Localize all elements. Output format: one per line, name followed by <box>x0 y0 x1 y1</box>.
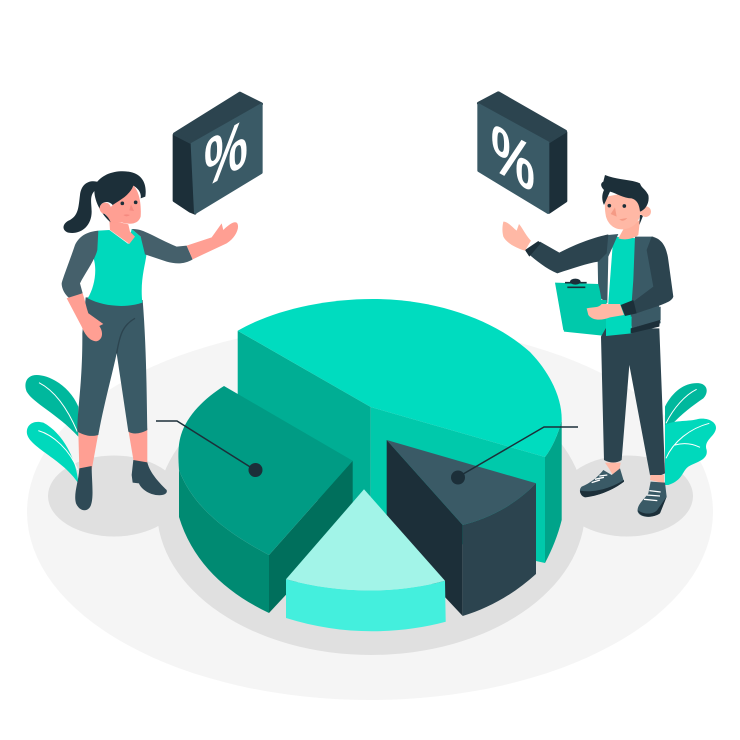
man <box>502 175 673 517</box>
right percent card <box>479 93 566 213</box>
woman: legs and boots <box>75 297 167 510</box>
left plant <box>25 375 78 483</box>
background blob <box>27 324 713 700</box>
green slice <box>178 386 353 613</box>
left foot shadow <box>48 456 180 536</box>
right foot shadow <box>561 456 693 536</box>
man: lower body <box>558 300 667 517</box>
right plant <box>665 383 716 485</box>
left percent card <box>174 93 261 213</box>
woman <box>62 171 238 510</box>
dark slice <box>387 440 536 616</box>
woman: head <box>94 171 146 244</box>
pie shadow <box>157 365 585 655</box>
main slice <box>238 299 562 563</box>
woman: forearm and hand on hip <box>67 293 103 341</box>
woman: upper body <box>62 171 238 341</box>
man: upper body <box>502 175 673 330</box>
percent sign: % <box>204 104 248 203</box>
percent sign: % <box>491 109 535 208</box>
right callout line <box>451 427 578 484</box>
left callout line <box>156 421 262 477</box>
pie chart <box>156 299 578 631</box>
light slice <box>286 489 446 631</box>
man: head <box>601 175 651 239</box>
